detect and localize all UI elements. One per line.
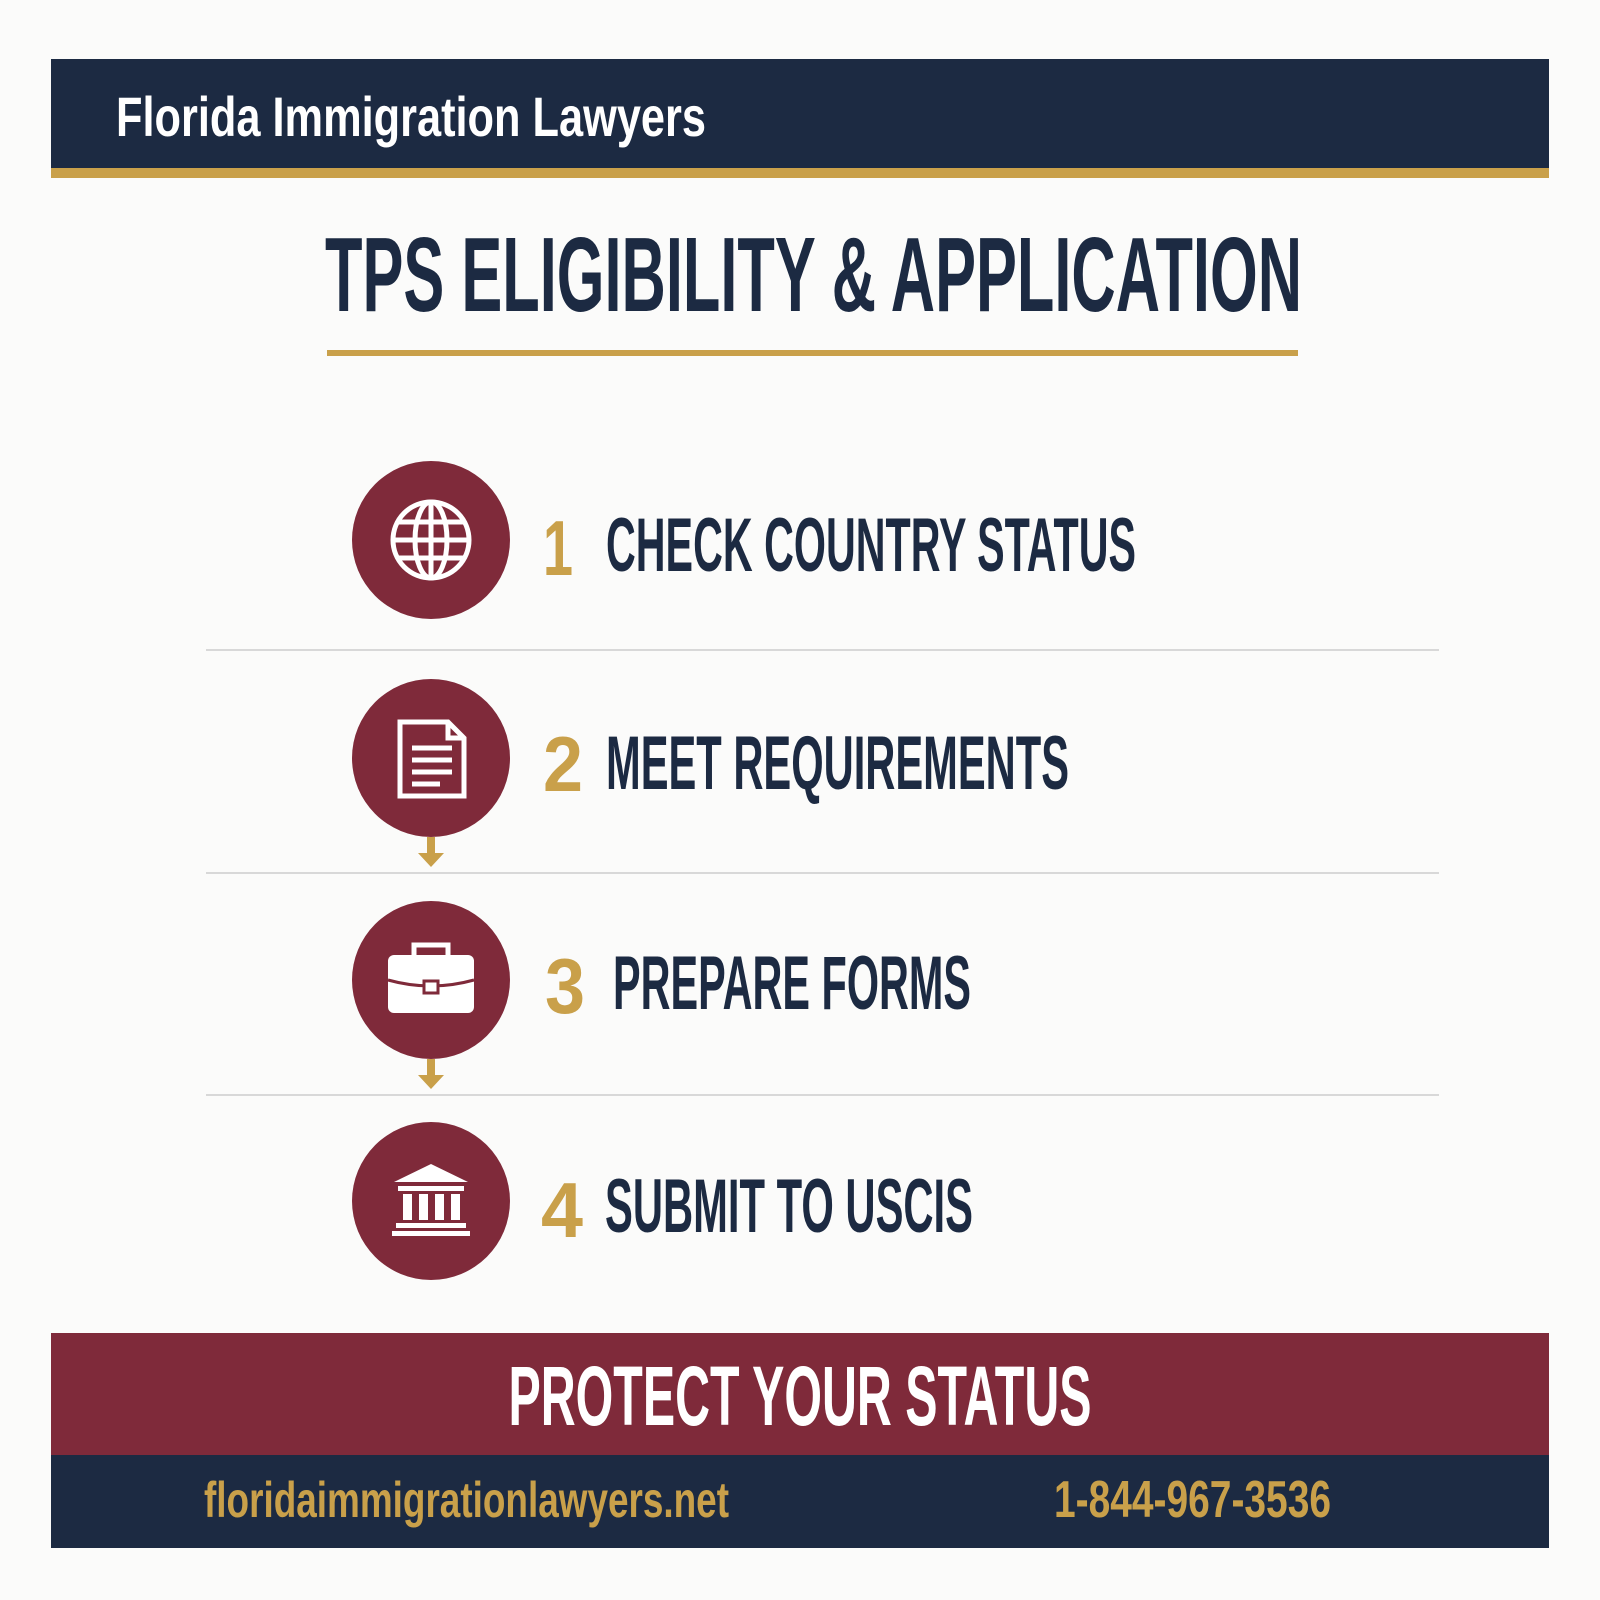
step 3 <box>352 901 971 1089</box>
header text: Florida Immigration Lawyers <box>116 85 706 148</box>
footer banner <box>51 1333 1549 1455</box>
step 4: 4 <box>541 1166 583 1254</box>
header bar <box>51 59 1549 178</box>
arrow <box>418 837 444 867</box>
step 4 <box>352 1122 973 1280</box>
arrow <box>418 1059 444 1089</box>
footer contact bar: floridaimmigrationlawyers.net <box>204 1472 729 1528</box>
step 1: CHECK COUNTRY STATUS <box>606 503 1136 588</box>
footer contact bar <box>51 1455 1549 1548</box>
footer contact bar: 1-844-967-3536 <box>1054 1471 1331 1529</box>
step 3: PREPARE FORMS <box>613 941 971 1026</box>
step 4: SUBMIT TO USCIS <box>605 1164 973 1249</box>
step 1: 1 <box>543 504 573 592</box>
icon: document <box>400 722 464 796</box>
step 2: MEET REQUIREMENTS <box>606 721 1069 806</box>
dividers <box>206 649 1439 1096</box>
icon: globe <box>393 502 469 578</box>
footer banner: PROTECT YOUR STATUS <box>508 1349 1092 1443</box>
step 2 <box>352 679 1069 867</box>
title <box>325 216 1302 356</box>
icon: briefcase <box>388 945 474 1013</box>
step 2: 2 <box>543 720 583 808</box>
step 1 <box>352 461 1136 619</box>
step 3: 3 <box>545 942 585 1030</box>
icon: government building <box>392 1164 470 1236</box>
